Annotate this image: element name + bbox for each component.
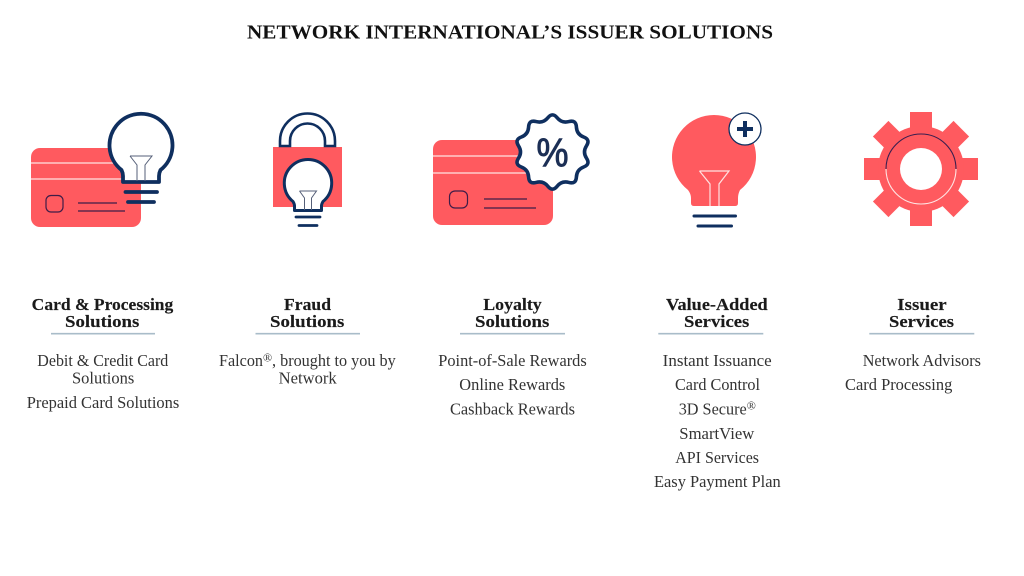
list: issuer items: Network Advisors: [863, 351, 981, 370]
heading: card and processing solutions: [32, 295, 174, 331]
list: value-added items: ®: [747, 398, 756, 412]
heading: issuer services: [889, 295, 954, 331]
icon: gear: [864, 112, 978, 226]
heading: fraud solutions: Solutions: [270, 312, 345, 331]
heading: fraud solutions: [270, 295, 345, 331]
list: fraud items: , brought to you by: [272, 351, 396, 370]
list: loyalty items: Online Rewards: [459, 375, 565, 394]
title: NETWORK INTERNATIONAL’S ISSUER SOLUTIONS: [247, 22, 773, 44]
list: value-added items: Card Control: [675, 375, 760, 394]
heading: value-added services: Value-Added: [666, 295, 768, 314]
list: issuer items: Card Processing: [845, 375, 952, 394]
list: fraud items: [219, 350, 396, 388]
list: loyalty items: Cashback Rewards: [450, 400, 575, 418]
list: fraud items: Network: [279, 368, 337, 388]
list: fraud items: Falcon: [219, 351, 263, 370]
panel: fraud solutions: [219, 114, 396, 388]
list: card and processing items: [27, 351, 179, 412]
panel: loyalty solutions: [433, 115, 588, 418]
list: value-added items: Easy Payment Plan: [654, 472, 781, 491]
list: card and processing items: Solutions: [72, 368, 134, 388]
icon: padlock with light bulb: [273, 114, 342, 226]
list: value-added items: SmartView: [679, 424, 754, 443]
list: issuer items: [845, 351, 981, 394]
heading: loyalty solutions: Loyalty: [483, 295, 542, 314]
heading: fraud solutions: Fraud: [284, 295, 332, 314]
heading: card and processing solutions: Card & Processing: [32, 295, 174, 314]
heading: issuer services: Issuer: [897, 295, 947, 314]
list: value-added items: Instant Issuance: [663, 351, 772, 370]
heading: value-added services: [666, 295, 768, 331]
list: value-added items: API Services: [675, 448, 759, 467]
panel: value-added services: [654, 113, 781, 491]
list: card and processing items: Debit & Credit Card: [37, 351, 169, 370]
icon: credit card with percent badge: [433, 115, 588, 225]
list: loyalty items: [438, 351, 587, 418]
heading: issuer services: Services: [889, 312, 954, 331]
heading: card and processing solutions: Solutions: [65, 312, 140, 331]
list: value-added items: 3D Secure: [679, 400, 747, 418]
heading: loyalty solutions: [475, 295, 550, 331]
panel: issuer services: [845, 112, 981, 394]
icon: light bulb with plus: [672, 113, 761, 226]
icon: credit card with light bulb: [31, 114, 173, 227]
panel: card and processing solutions: [27, 114, 179, 412]
heading: value-added services: Services: [684, 312, 750, 331]
list: value-added items: [654, 351, 781, 491]
list: fraud items: ®: [263, 350, 272, 364]
list: loyalty items: Point-of-Sale Rewards: [438, 351, 587, 370]
list: card and processing items: Prepaid Card Solutions: [27, 393, 179, 412]
heading: loyalty solutions: Solutions: [475, 312, 550, 331]
icon: credit card with percent badge: %: [536, 132, 568, 176]
